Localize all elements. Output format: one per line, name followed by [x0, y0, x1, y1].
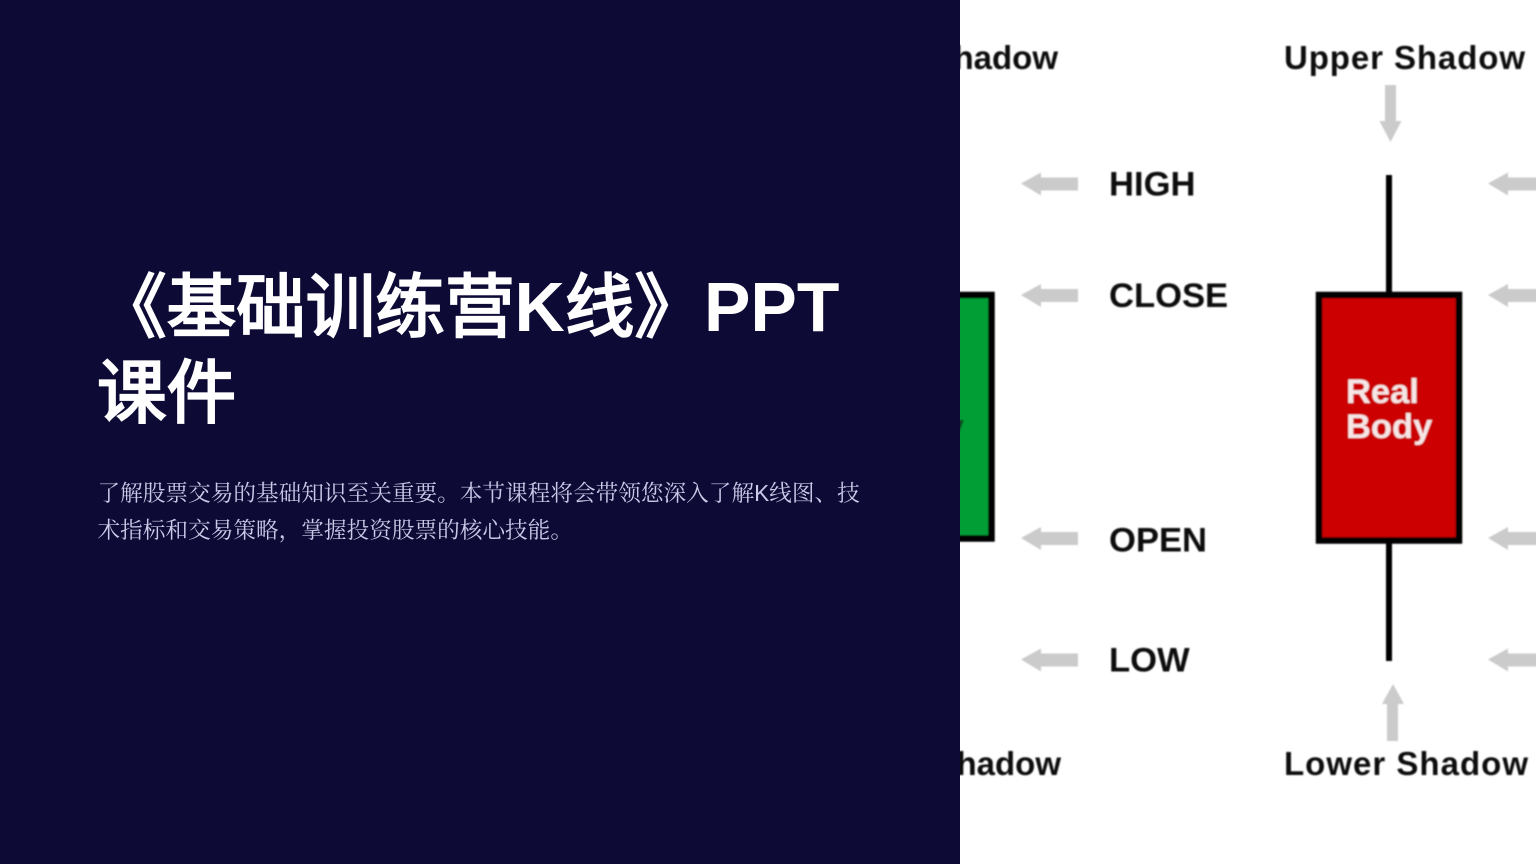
arrow: upper shadow	[1380, 85, 1402, 142]
green candle body	[879, 295, 992, 538]
left arrows	[1021, 172, 1078, 672]
arrow: lower shadow	[1382, 684, 1404, 741]
description text	[98, 480, 860, 543]
red candlestick: Body	[1346, 408, 1432, 446]
title	[97, 268, 839, 432]
description text: 了解股票交易的基础知识至关重要。本节课程将会带领您深入了解K线图、技	[98, 480, 860, 506]
title: 课件	[97, 354, 236, 432]
label: upper shadow: Upper Shadow	[1284, 39, 1525, 76]
price labels: LOW	[1109, 642, 1190, 680]
panel: dark title panel	[0, 0, 960, 864]
candlestick diagram	[960, 39, 1536, 782]
description text: 术指标和交易策略，掌握投资股票的核心技能。	[98, 517, 573, 543]
price labels: OPEN	[1109, 522, 1207, 560]
price labels	[1109, 166, 1228, 680]
label: lower shadow: Lower Shadow	[1284, 745, 1528, 782]
red candlestick: Real	[1346, 373, 1419, 411]
price labels: HIGH	[1109, 166, 1195, 204]
right arrows	[1488, 172, 1536, 672]
price labels: CLOSE	[1109, 277, 1228, 315]
red candlestick	[1319, 175, 1459, 661]
title: 《基础训练营K线》PPT	[97, 268, 839, 346]
